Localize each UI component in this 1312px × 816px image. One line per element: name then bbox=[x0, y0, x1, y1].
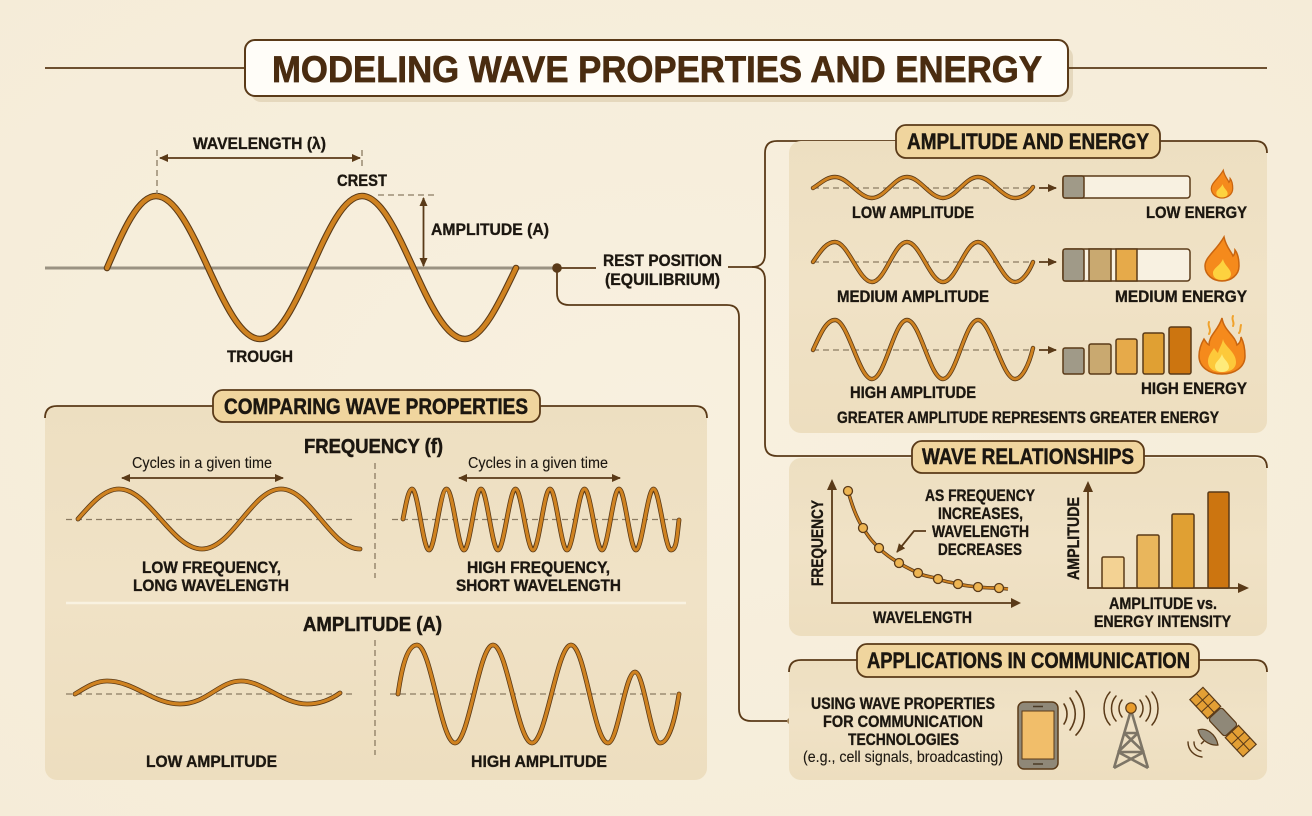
callout: frequency and wavelength: WAVELENGTH bbox=[932, 522, 1029, 541]
line chart: frequency vs wavelength bbox=[808, 479, 1021, 627]
heading: comparing wave properties: COMPARING WAVE PROPERTIES bbox=[224, 394, 528, 419]
panel: wave relationships bbox=[789, 441, 1267, 636]
high frequency example: HIGH FREQUENCY, bbox=[467, 558, 610, 577]
text: applications description bbox=[803, 694, 1003, 766]
title banner: MODELING WAVE PROPERTIES AND ENERGY bbox=[272, 49, 1042, 90]
row: high amplitude bbox=[813, 316, 1248, 427]
panel: amplitude and energy bbox=[45, 125, 1267, 780]
panel: applications in communication bbox=[789, 644, 1267, 780]
text: applications description: FOR COMMUNICATION bbox=[823, 712, 983, 731]
heading: applications bbox=[857, 644, 1199, 677]
subheading: amplitude: AMPLITUDE (A) bbox=[303, 614, 442, 636]
low frequency example: Cycles in a given time bbox=[132, 455, 272, 472]
callout: frequency and wavelength: INCREASES, bbox=[938, 504, 1023, 523]
heading: wave relationships: WAVE RELATIONSHIPS bbox=[922, 444, 1134, 469]
rest position label: (EQUILIBRIUM) bbox=[605, 270, 720, 289]
rest position label bbox=[603, 251, 722, 289]
text: applications description: USING WAVE PROPERTIES bbox=[811, 694, 995, 713]
row: high amplitude: HIGH ENERGY bbox=[1141, 379, 1248, 398]
callout: frequency and wavelength bbox=[897, 486, 1036, 559]
text: applications description: TECHNOLOGIES bbox=[848, 730, 959, 749]
icon: phone bbox=[1018, 691, 1084, 769]
callout: frequency and wavelength: DECREASES bbox=[938, 540, 1022, 559]
row: medium amplitude: MEDIUM ENERGY bbox=[1115, 287, 1248, 306]
row: medium amplitude bbox=[813, 237, 1248, 306]
bar chart: amplitude vs energy intensity bbox=[1064, 481, 1249, 631]
heading: wave relationships bbox=[912, 441, 1144, 473]
panel: comparing wave properties bbox=[45, 390, 707, 780]
bar chart: amplitude vs energy intensity: AMPLITUDE bbox=[1064, 497, 1083, 580]
icon: radio tower bbox=[1104, 692, 1158, 768]
amplitude marker: AMPLITUDE (A) bbox=[431, 220, 549, 239]
subheading: frequency: FREQUENCY (f) bbox=[304, 436, 443, 458]
trough label: TROUGH bbox=[227, 347, 293, 366]
connectors bbox=[552, 141, 912, 724]
wavelength marker: WAVELENGTH (λ) bbox=[193, 134, 326, 153]
rest position label: REST POSITION bbox=[603, 251, 722, 270]
low frequency example: LONG WAVELENGTH bbox=[133, 576, 289, 595]
low frequency example: LOW FREQUENCY, bbox=[142, 558, 281, 577]
low amplitude example: LOW AMPLITUDE bbox=[146, 752, 277, 771]
bar chart: amplitude vs energy intensity: ENERGY INTENSITY bbox=[1094, 612, 1232, 631]
high frequency example bbox=[392, 455, 680, 595]
heading: amplitude and energy: AMPLITUDE AND ENERGY bbox=[907, 129, 1149, 154]
icon: satellite bbox=[1188, 687, 1256, 757]
row: medium amplitude: MEDIUM AMPLITUDE bbox=[837, 287, 989, 306]
row: low amplitude: LOW ENERGY bbox=[1146, 203, 1248, 222]
text: applications description: (e.g., cell signals, broadcasting) bbox=[803, 749, 1003, 766]
low amplitude example bbox=[66, 681, 356, 771]
heading: applications: APPLICATIONS IN COMMUNICATION bbox=[867, 648, 1190, 673]
icon: large flame bbox=[1199, 316, 1245, 374]
line chart: frequency vs wavelength: WAVELENGTH bbox=[873, 608, 972, 627]
caption: GREATER AMPLITUDE REPRESENTS GREATER ENERGY bbox=[837, 408, 1220, 427]
crest label: CREST bbox=[337, 171, 388, 190]
bar chart: amplitude vs energy intensity: AMPLITUDE vs. bbox=[1109, 594, 1217, 613]
icon: medium flame bbox=[1205, 237, 1239, 281]
wave anatomy diagram bbox=[45, 134, 557, 366]
low frequency example bbox=[66, 455, 360, 595]
main wave bbox=[107, 196, 516, 339]
row: low amplitude: LOW AMPLITUDE bbox=[852, 203, 974, 222]
line chart: frequency vs wavelength: FREQUENCY bbox=[808, 499, 827, 586]
high amplitude example: HIGH AMPLITUDE bbox=[471, 752, 607, 771]
high amplitude example bbox=[390, 645, 680, 771]
title banner bbox=[45, 40, 1267, 102]
row: high amplitude: HIGH AMPLITUDE bbox=[850, 383, 976, 402]
wavelength marker bbox=[157, 134, 362, 194]
callout: frequency and wavelength: AS FREQUENCY bbox=[925, 486, 1036, 505]
row: low amplitude bbox=[813, 170, 1248, 222]
icon: small flame bbox=[1211, 170, 1233, 198]
heading: comparing wave properties bbox=[213, 390, 540, 422]
high frequency example: Cycles in a given time bbox=[468, 455, 608, 472]
high frequency example: SHORT WAVELENGTH bbox=[456, 576, 621, 595]
heading: amplitude and energy bbox=[896, 125, 1160, 158]
